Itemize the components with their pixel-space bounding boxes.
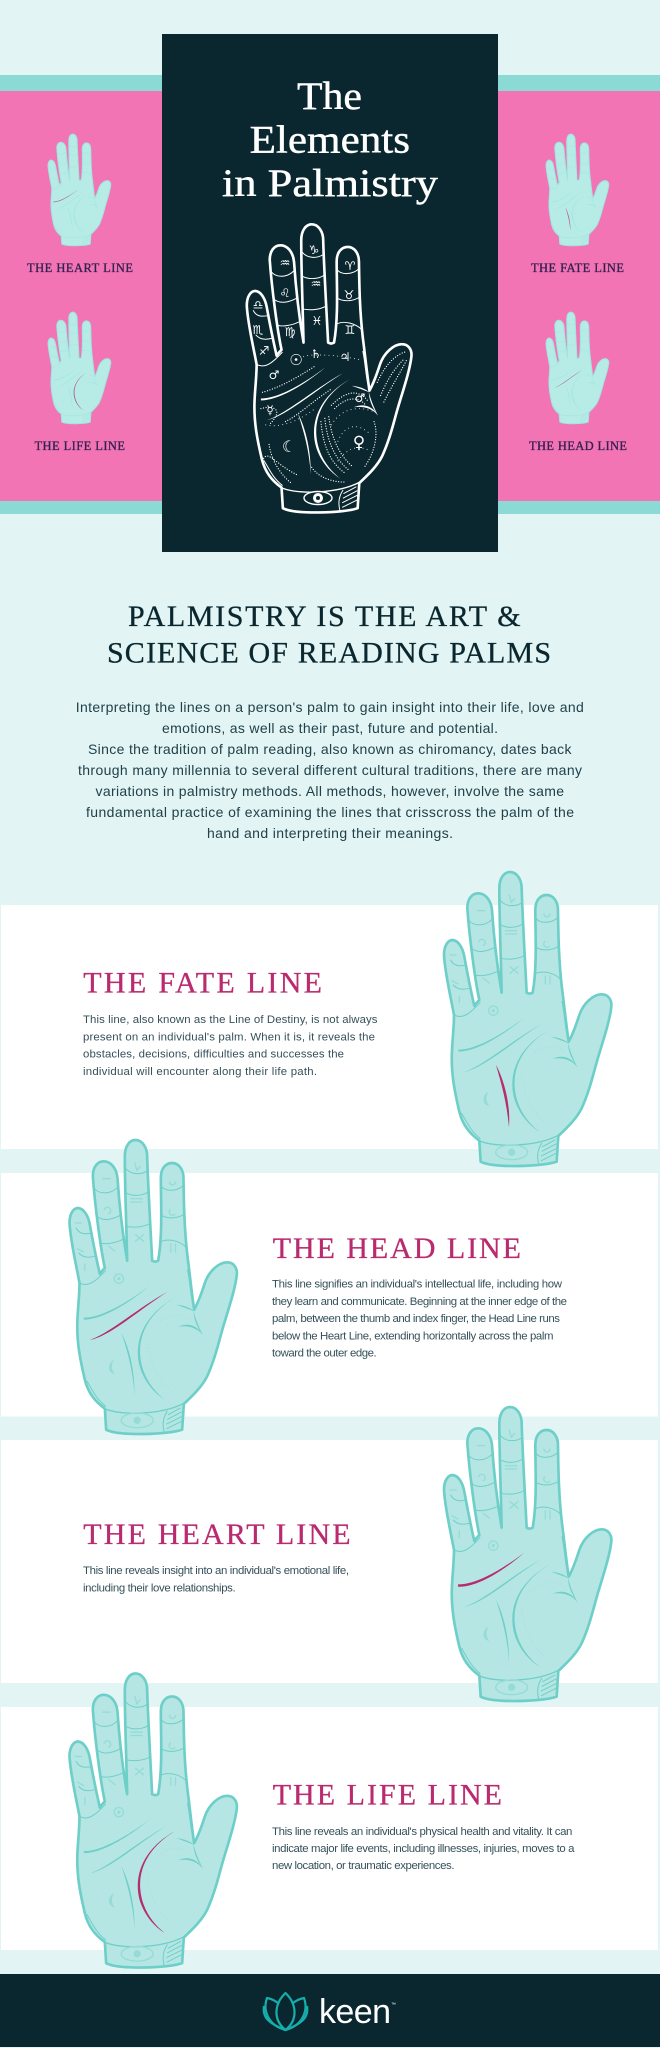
icon: white palmistry hand: ♍ xyxy=(285,325,295,339)
icon: white palmistry hand: ♐ xyxy=(259,344,269,358)
section text: individual will encounter along their life path. xyxy=(83,1066,317,1078)
icon: white palmistry hand: ♊ xyxy=(345,323,355,337)
panel: the fate line xyxy=(1,872,658,1166)
icon: white palmistry hand xyxy=(247,224,412,512)
heading: PALMISTRY IS THE ART & xyxy=(128,600,521,633)
icon: hand with fate line xyxy=(444,872,611,1166)
section text: toward the outer edge. xyxy=(272,1348,377,1360)
panel: dark title card xyxy=(162,34,498,552)
panel: the life line xyxy=(1,1673,658,1968)
icon: keen lotus logo xyxy=(264,1993,307,2030)
section text: present on an individual's palm. When it is, it reveals the xyxy=(83,1031,375,1043)
icon: white palmistry hand: ♌ xyxy=(280,286,290,300)
icon: white palmistry hand: ♄ xyxy=(311,347,321,361)
icon: white palmistry hand: ♀ xyxy=(353,433,365,453)
section text xyxy=(83,1014,378,1078)
icon: white palmistry hand: ♂ xyxy=(269,368,279,382)
footer bar xyxy=(0,1974,660,2047)
section text: indicate major life events, including illnesses, injuries, moves to a xyxy=(272,1843,575,1855)
heading: SCIENCE OF READING PALMS xyxy=(107,636,551,670)
icon: hand with heart line xyxy=(444,1407,611,1701)
mini card: the life line: THE LIFE LINE xyxy=(34,439,125,453)
logo wordmark: keen xyxy=(319,1993,391,2031)
section text xyxy=(83,1565,349,1594)
section heading: THE LIFE LINE xyxy=(273,1779,502,1812)
title xyxy=(222,75,439,205)
section text: below the Heart Line, extending horizontally across the palm xyxy=(272,1330,554,1342)
intro paragraph: Interpreting the lines on a person's palm to gain insight into their life, love and xyxy=(76,699,584,715)
mini card: the heart line xyxy=(27,134,133,275)
intro paragraph: through many millennia to several different cultural traditions, there are many xyxy=(78,762,582,778)
panel: the head line xyxy=(1,1140,658,1434)
icon: white palmistry hand: ♂ xyxy=(355,391,365,405)
panel: the heart line xyxy=(1,1407,658,1701)
intro paragraph: fundamental practice of examining the lines that crisscross the palm of the xyxy=(86,804,574,820)
mini card: the head line xyxy=(529,312,627,453)
mini card: the fate line xyxy=(531,134,624,275)
intro paragraph: Since the tradition of palm reading, also known as chiromancy, dates back xyxy=(88,741,572,757)
mini card: the life line xyxy=(34,312,125,453)
icon: eye on wrist xyxy=(304,492,332,504)
intro paragraph: emotions, as well as their past, future and potential. xyxy=(162,720,498,736)
section text: new location, or traumatic experiences. xyxy=(272,1860,454,1872)
section text: palm, between the thumb and index finger, the Head Line runs xyxy=(272,1313,560,1325)
section text: obstacles, decisions, difficulties and successes the xyxy=(83,1049,344,1061)
icon: hand with head line xyxy=(69,1140,237,1434)
section text: This line reveals an individual's physical health and vitality. It can xyxy=(272,1826,572,1838)
icon: white palmistry hand: ♉ xyxy=(344,288,354,302)
icon: white palmistry hand: ☾ xyxy=(282,437,296,456)
icon: white palmistry hand: ♓ xyxy=(312,314,322,328)
heading xyxy=(107,600,551,670)
mini card: the head line: THE HEAD LINE xyxy=(529,439,627,453)
icon: white palmistry hand: ☉ xyxy=(289,351,303,369)
icon: white palmistry hand: ♈ xyxy=(345,259,356,273)
icon: white palmistry hand: ♃ xyxy=(340,350,350,364)
title: Elements xyxy=(250,118,410,162)
icon: white palmistry hand: ♏ xyxy=(253,323,263,337)
title: in Palmistry xyxy=(222,162,439,205)
mini card: the fate line: THE FATE LINE xyxy=(531,261,624,275)
logo wordmark: ™ xyxy=(391,2002,396,2008)
section text: This line, also known as the Line of Destiny, is not always xyxy=(83,1014,378,1026)
icon: white palmistry hand: ♑ xyxy=(309,243,319,257)
icon: white palmistry hand: ☿ xyxy=(266,403,274,417)
icon: white palmistry hand: ♎ xyxy=(253,298,263,312)
section text xyxy=(272,1279,567,1360)
section heading: THE FATE LINE xyxy=(83,966,322,1000)
icon: hand with life line xyxy=(69,1673,237,1968)
section heading: THE HEAD LINE xyxy=(273,1232,521,1265)
section text: This line signifies an individual's intellectual life, including how xyxy=(272,1279,563,1291)
intro paragraph xyxy=(76,699,584,841)
section text xyxy=(272,1826,575,1872)
mini card: the heart line: THE HEART LINE xyxy=(27,261,133,275)
section heading: THE HEART LINE xyxy=(83,1518,351,1551)
section text: This line reveals insight into an individual's emotional life, xyxy=(83,1565,349,1577)
title: The xyxy=(297,75,362,118)
intro paragraph: variations in palmistry methods. All methods, however, involve the same xyxy=(96,783,564,799)
section text: including their love relationships. xyxy=(83,1582,236,1594)
icon: white palmistry hand: ♒ xyxy=(280,256,290,270)
section text: they learn and communicate. Beginning at the inner edge of the xyxy=(272,1296,567,1308)
icon: white palmistry hand: ♒ xyxy=(311,277,321,291)
header banner: left and right teal and pink bands xyxy=(0,75,660,514)
intro paragraph: hand and interpreting their meanings. xyxy=(207,825,453,841)
